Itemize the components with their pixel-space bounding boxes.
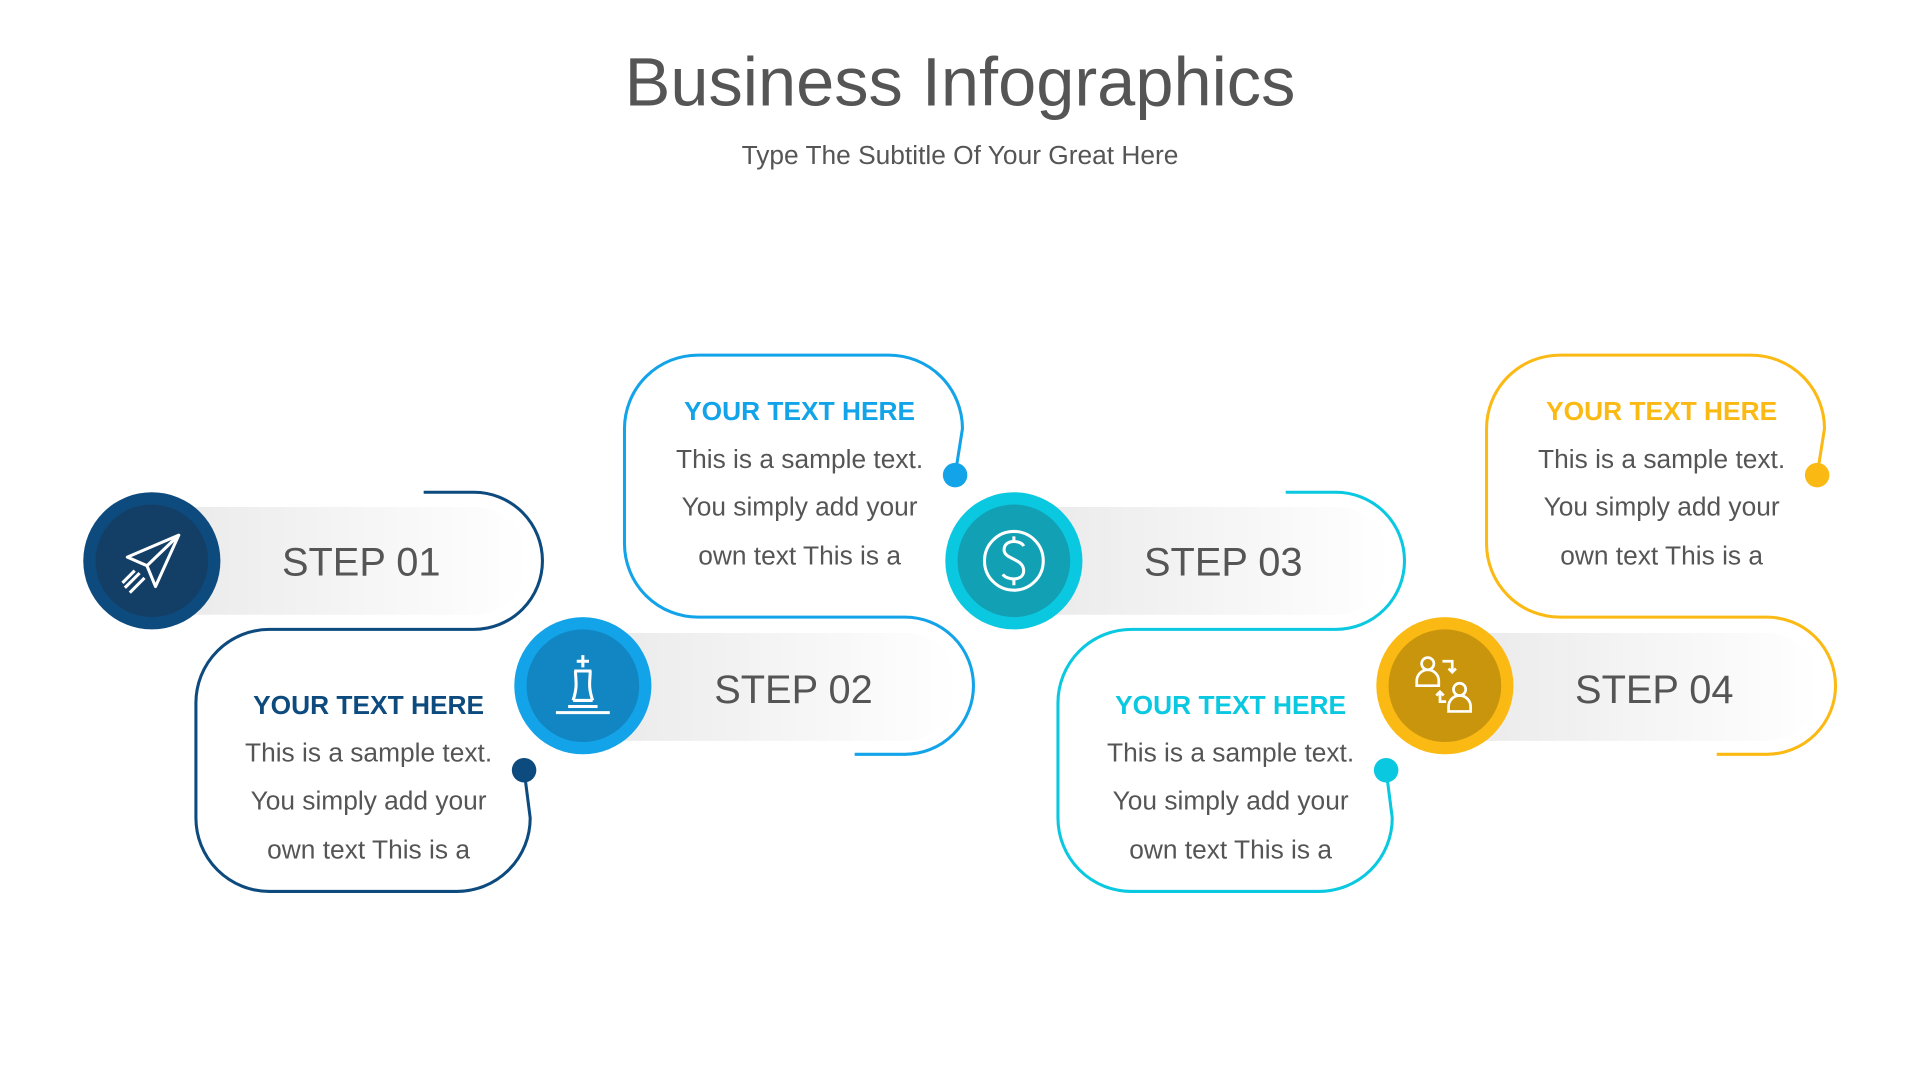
dot — [1805, 463, 1829, 487]
pill: step 01 — [152, 507, 528, 615]
text block: step 04: This is a sample text. — [1538, 444, 1785, 474]
text block: step 01: This is a sample text. — [245, 738, 492, 768]
text block: step 04 — [1538, 396, 1785, 570]
dot — [512, 758, 536, 782]
outline: step 04 — [1487, 355, 1836, 754]
title: Business Infographics — [625, 43, 1295, 120]
text block: step 03 — [1107, 690, 1354, 864]
text block: step 01: own text This is a — [267, 834, 470, 864]
icon circle: dollar — [945, 492, 1082, 629]
dot — [1374, 758, 1398, 782]
text block: step 04: YOUR TEXT HERE — [1546, 396, 1777, 426]
text block: step 02: own text This is a — [698, 540, 901, 570]
pill: step 02 — [583, 633, 959, 741]
text block: step 03: This is a sample text. — [1107, 738, 1354, 768]
text block: step 02 — [676, 396, 923, 570]
step 04 — [1376, 355, 1836, 754]
label: step 03: STEP 03 — [1144, 541, 1303, 585]
icon circle: chess king — [514, 617, 651, 754]
pill: step 03 — [1014, 507, 1390, 615]
step 01 — [83, 492, 542, 891]
text block: step 04: You simply add your — [1544, 492, 1780, 522]
text block: step 02: This is a sample text. — [676, 444, 923, 474]
text block: step 03: You simply add your — [1113, 785, 1349, 815]
dot — [943, 463, 967, 487]
step 02 — [514, 355, 973, 754]
label: step 04: STEP 04 — [1575, 668, 1734, 712]
outline: step 03 — [1058, 492, 1404, 891]
label: step 02: STEP 02 — [714, 668, 873, 712]
step 03 — [945, 492, 1404, 891]
pill: step 04 — [1445, 633, 1821, 741]
text block: step 04: own text This is a — [1560, 540, 1763, 570]
text block: step 01 — [245, 690, 492, 864]
text block: step 03: YOUR TEXT HERE — [1115, 690, 1346, 720]
icon circle: paper plane — [83, 492, 220, 629]
outline: step 02 — [624, 355, 973, 754]
text block: step 02: You simply add your — [682, 492, 918, 522]
text block: step 01: YOUR TEXT HERE — [253, 690, 484, 720]
label: step 01: STEP 01 — [282, 541, 440, 585]
text block: step 02: YOUR TEXT HERE — [684, 396, 915, 426]
text block: step 03: own text This is a — [1129, 834, 1332, 864]
outline: step 01 — [196, 492, 542, 891]
subtitle: Type The Subtitle Of Your Great Here — [742, 140, 1178, 170]
text block: step 01: You simply add your — [251, 785, 487, 815]
icon circle: people swap — [1376, 617, 1513, 754]
